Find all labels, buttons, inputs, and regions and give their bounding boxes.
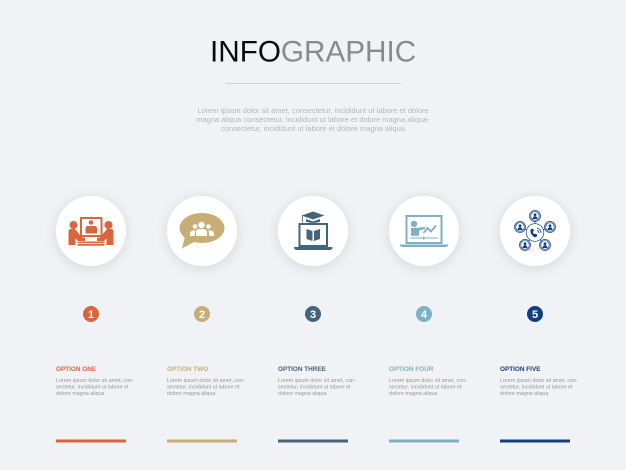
- number badge three: 3: [310, 309, 316, 321]
- option one text: [56, 378, 134, 397]
- option three text: [278, 378, 356, 397]
- number badge two: [194, 306, 210, 322]
- intro text: consectetur, incididunt ut labore et dolore magna aliqua: [221, 124, 406, 133]
- option one text: Lorem ipsum dolor sit amet, con-: [56, 378, 134, 384]
- option four text: [389, 378, 467, 397]
- option three text: sectetur, incididunt ut labore et: [278, 384, 351, 390]
- option five text: [500, 378, 578, 397]
- option four text: dolore magna aliqua: [389, 391, 437, 397]
- option four bar: [389, 440, 459, 442]
- icon: presentation laptop: [400, 215, 448, 247]
- option three bar: [278, 440, 348, 442]
- number badge three: [305, 306, 321, 322]
- option five bar: [500, 440, 570, 442]
- option one text: dolore magna aliqua: [56, 391, 104, 397]
- intro text: magna aliqua consectetur, incididunt ut labore et dolore magna aliqua-: [196, 115, 430, 124]
- option five text: Lorem ipsum dolor sit amet, con-: [500, 378, 578, 384]
- icon circle two: [167, 196, 237, 266]
- option two text: [167, 378, 245, 397]
- option one text: sectetur, incididunt ut labore et: [56, 384, 129, 390]
- option five text: sectetur, incididunt ut labore et: [500, 384, 573, 390]
- number badge five: [527, 306, 543, 322]
- icon: contact network: [514, 210, 556, 250]
- option five heading: OPTION FIVE: [500, 366, 541, 373]
- number badge four: 4: [421, 309, 428, 321]
- icon: online education laptop: [294, 212, 332, 250]
- option two bar: [167, 440, 237, 442]
- panel: option two: [167, 196, 245, 442]
- panel: option four: [389, 196, 467, 442]
- option two text: Lorem ipsum dolor sit amet, con-: [167, 378, 245, 384]
- option five text: dolore magna aliqua: [500, 391, 548, 397]
- panel: option one: [56, 196, 134, 442]
- panel: option three: [278, 196, 356, 442]
- option four heading: OPTION FOUR: [389, 366, 434, 373]
- intro text: Lorem ipsum dolor sit amet, consectetur, incididunt ut labore et dolore: [197, 106, 429, 115]
- title: INFOGRAPHIC: [210, 36, 416, 68]
- icon: video meeting: [68, 217, 114, 246]
- option four text: sectetur, incididunt ut labore et: [389, 384, 462, 390]
- option three text: Lorem ipsum dolor sit amet, con-: [278, 378, 356, 384]
- icon: speech bubble with people: [180, 213, 224, 248]
- number badge five: 5: [532, 309, 538, 321]
- number badge one: 1: [88, 309, 94, 321]
- option one heading: OPTION ONE: [56, 366, 97, 373]
- option four text: Lorem ipsum dolor sit amet, con-: [389, 378, 467, 384]
- number badge two: 2: [199, 309, 205, 321]
- icon circle five: [500, 196, 570, 266]
- icon circle one: [56, 196, 126, 266]
- option two heading: OPTION TWO: [167, 366, 208, 373]
- option one bar: [56, 440, 126, 442]
- panel: option five: [500, 196, 578, 442]
- option three text: dolore magna aliqua: [278, 391, 326, 397]
- icon circle four: [389, 196, 459, 266]
- icon circle three: [278, 196, 348, 266]
- number badge one: [83, 306, 99, 322]
- number badge four: [416, 306, 432, 322]
- option two text: dolore magna aliqua: [167, 391, 215, 397]
- option three heading: OPTION THREE: [278, 366, 327, 373]
- option two text: sectetur, incididunt ut labore et: [167, 384, 240, 390]
- intro text: [196, 106, 430, 133]
